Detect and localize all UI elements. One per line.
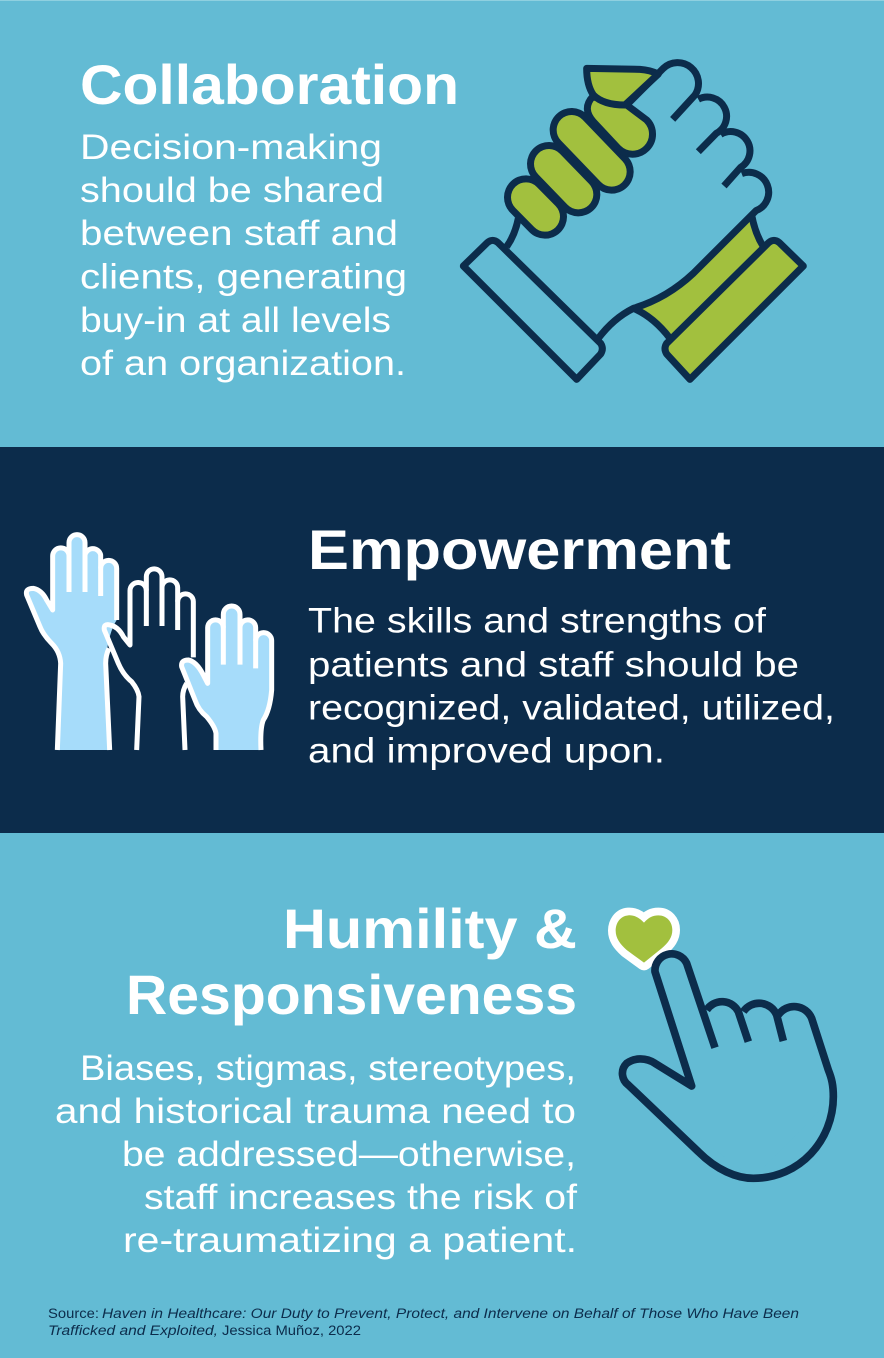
heading: Humility & Responsiveness: Humility & [283,897,577,960]
text block: humility description: staff increases the risk of [144,1178,577,1217]
text block: empowerment description: recognized, validated, utilized, [308,688,835,728]
text block: humility description: re-traumatizing a patient. [123,1221,577,1260]
text block: collaboration description: should be shared [80,171,384,210]
source note: Source: [48,1306,99,1321]
text block: collaboration description: of an organization. [80,344,406,383]
heading: Humility & Responsiveness: Responsiveness [126,963,577,1026]
heading: Empowerment: Empowerment [308,518,731,581]
text block: collaboration description: between staff and [80,214,398,253]
panel: empowerment [26,518,835,770]
text block: humility description: be addressed—otherwise, [122,1135,576,1174]
text block: empowerment description: patients and staff should be [308,646,799,684]
text block: empowerment description [308,602,835,770]
source note: Trafficked and Exploited, [48,1323,218,1338]
heading: Collaboration: Collaboration [80,53,459,116]
text block: collaboration description: clients, generating [80,258,407,296]
text block: humility description: and historical trauma need to [55,1092,576,1131]
panel: collaboration [80,53,803,383]
text block: collaboration description: Decision-making [80,128,382,167]
text block: collaboration description: buy-in at all levels [80,301,391,340]
source note [48,1306,799,1338]
text block: humility description [55,1049,577,1260]
text block: collaboration description [80,128,407,383]
icon: clasped hands [463,63,803,379]
text block: empowerment description: The skills and strengths of [308,602,766,640]
heading: Humility & Responsiveness [126,897,577,1026]
icon: raised hands [26,535,272,750]
source note: Haven in Healthcare: Our Duty to Prevent, Protect, and Intervene on Behalf of Those Who Have Been [102,1306,799,1321]
panel: empowerment background [0,447,884,833]
text block: humility description: Biases, stigmas, stereotypes, [80,1049,576,1088]
panel: humility and responsiveness [55,897,833,1260]
text block: empowerment description: and improved upon. [308,732,665,770]
source note: Jessica Muñoz, 2022 [222,1323,361,1338]
icon: finger touching heart [616,915,833,1178]
